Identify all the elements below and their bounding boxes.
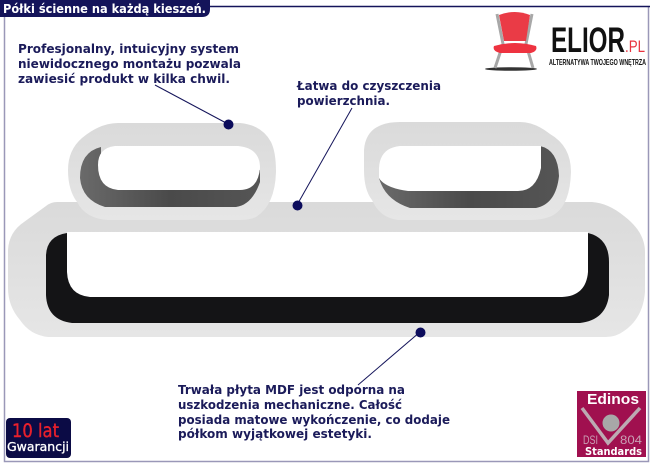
logo: Elior xyxy=(485,12,646,71)
text: MDF board: posiada matowe wykończenie, co dodaje xyxy=(178,413,450,427)
badge: 10 years warranty: Gwarancji xyxy=(7,440,69,454)
text: easy to clean: powierzchnia. xyxy=(297,94,390,108)
title: Półki ścienne na każdą kieszeń. xyxy=(3,1,206,16)
badge: 10 years warranty: 10 lat xyxy=(12,420,59,442)
large shelf xyxy=(8,202,645,337)
callout: mounting xyxy=(155,85,234,130)
small shelf right xyxy=(364,122,571,220)
text: mounting system: niewidocznego montażu pozwala xyxy=(18,57,241,71)
badge: Edinos standards: Edinos xyxy=(587,391,639,408)
text: easy to clean: Łatwa do czyszczenia xyxy=(296,79,441,93)
callout: surface xyxy=(292,108,352,210)
badge: Edinos standards: Standards xyxy=(585,445,642,458)
callout lines and dots xyxy=(155,85,426,385)
callout: MDF xyxy=(358,328,426,385)
badge: Edinos standards xyxy=(577,391,646,458)
text: MDF board: Trwała płyta MDF jest odporna na xyxy=(178,383,405,397)
text: MDF board: uszkodzenia mechaniczne. Całość xyxy=(178,398,402,412)
text: mounting system: Profesjonalny, intuicyjny system xyxy=(18,42,239,56)
badge: 10 years warranty xyxy=(6,418,71,458)
text: MDF board: półkom wyjątkowej estetyki. xyxy=(178,427,372,441)
text: mounting system: zawiesić produkt w kilka chwil. xyxy=(18,72,230,86)
badge: Edinos standards: 804 xyxy=(620,435,643,447)
text: MDF board xyxy=(178,383,450,441)
small shelf left xyxy=(68,123,276,220)
text: easy to clean xyxy=(296,79,441,108)
text: mounting system xyxy=(18,42,241,86)
logo: Elior: .PL xyxy=(625,37,645,56)
icon: red chair xyxy=(485,12,537,71)
badge: Edinos standards: DSI xyxy=(583,435,598,447)
